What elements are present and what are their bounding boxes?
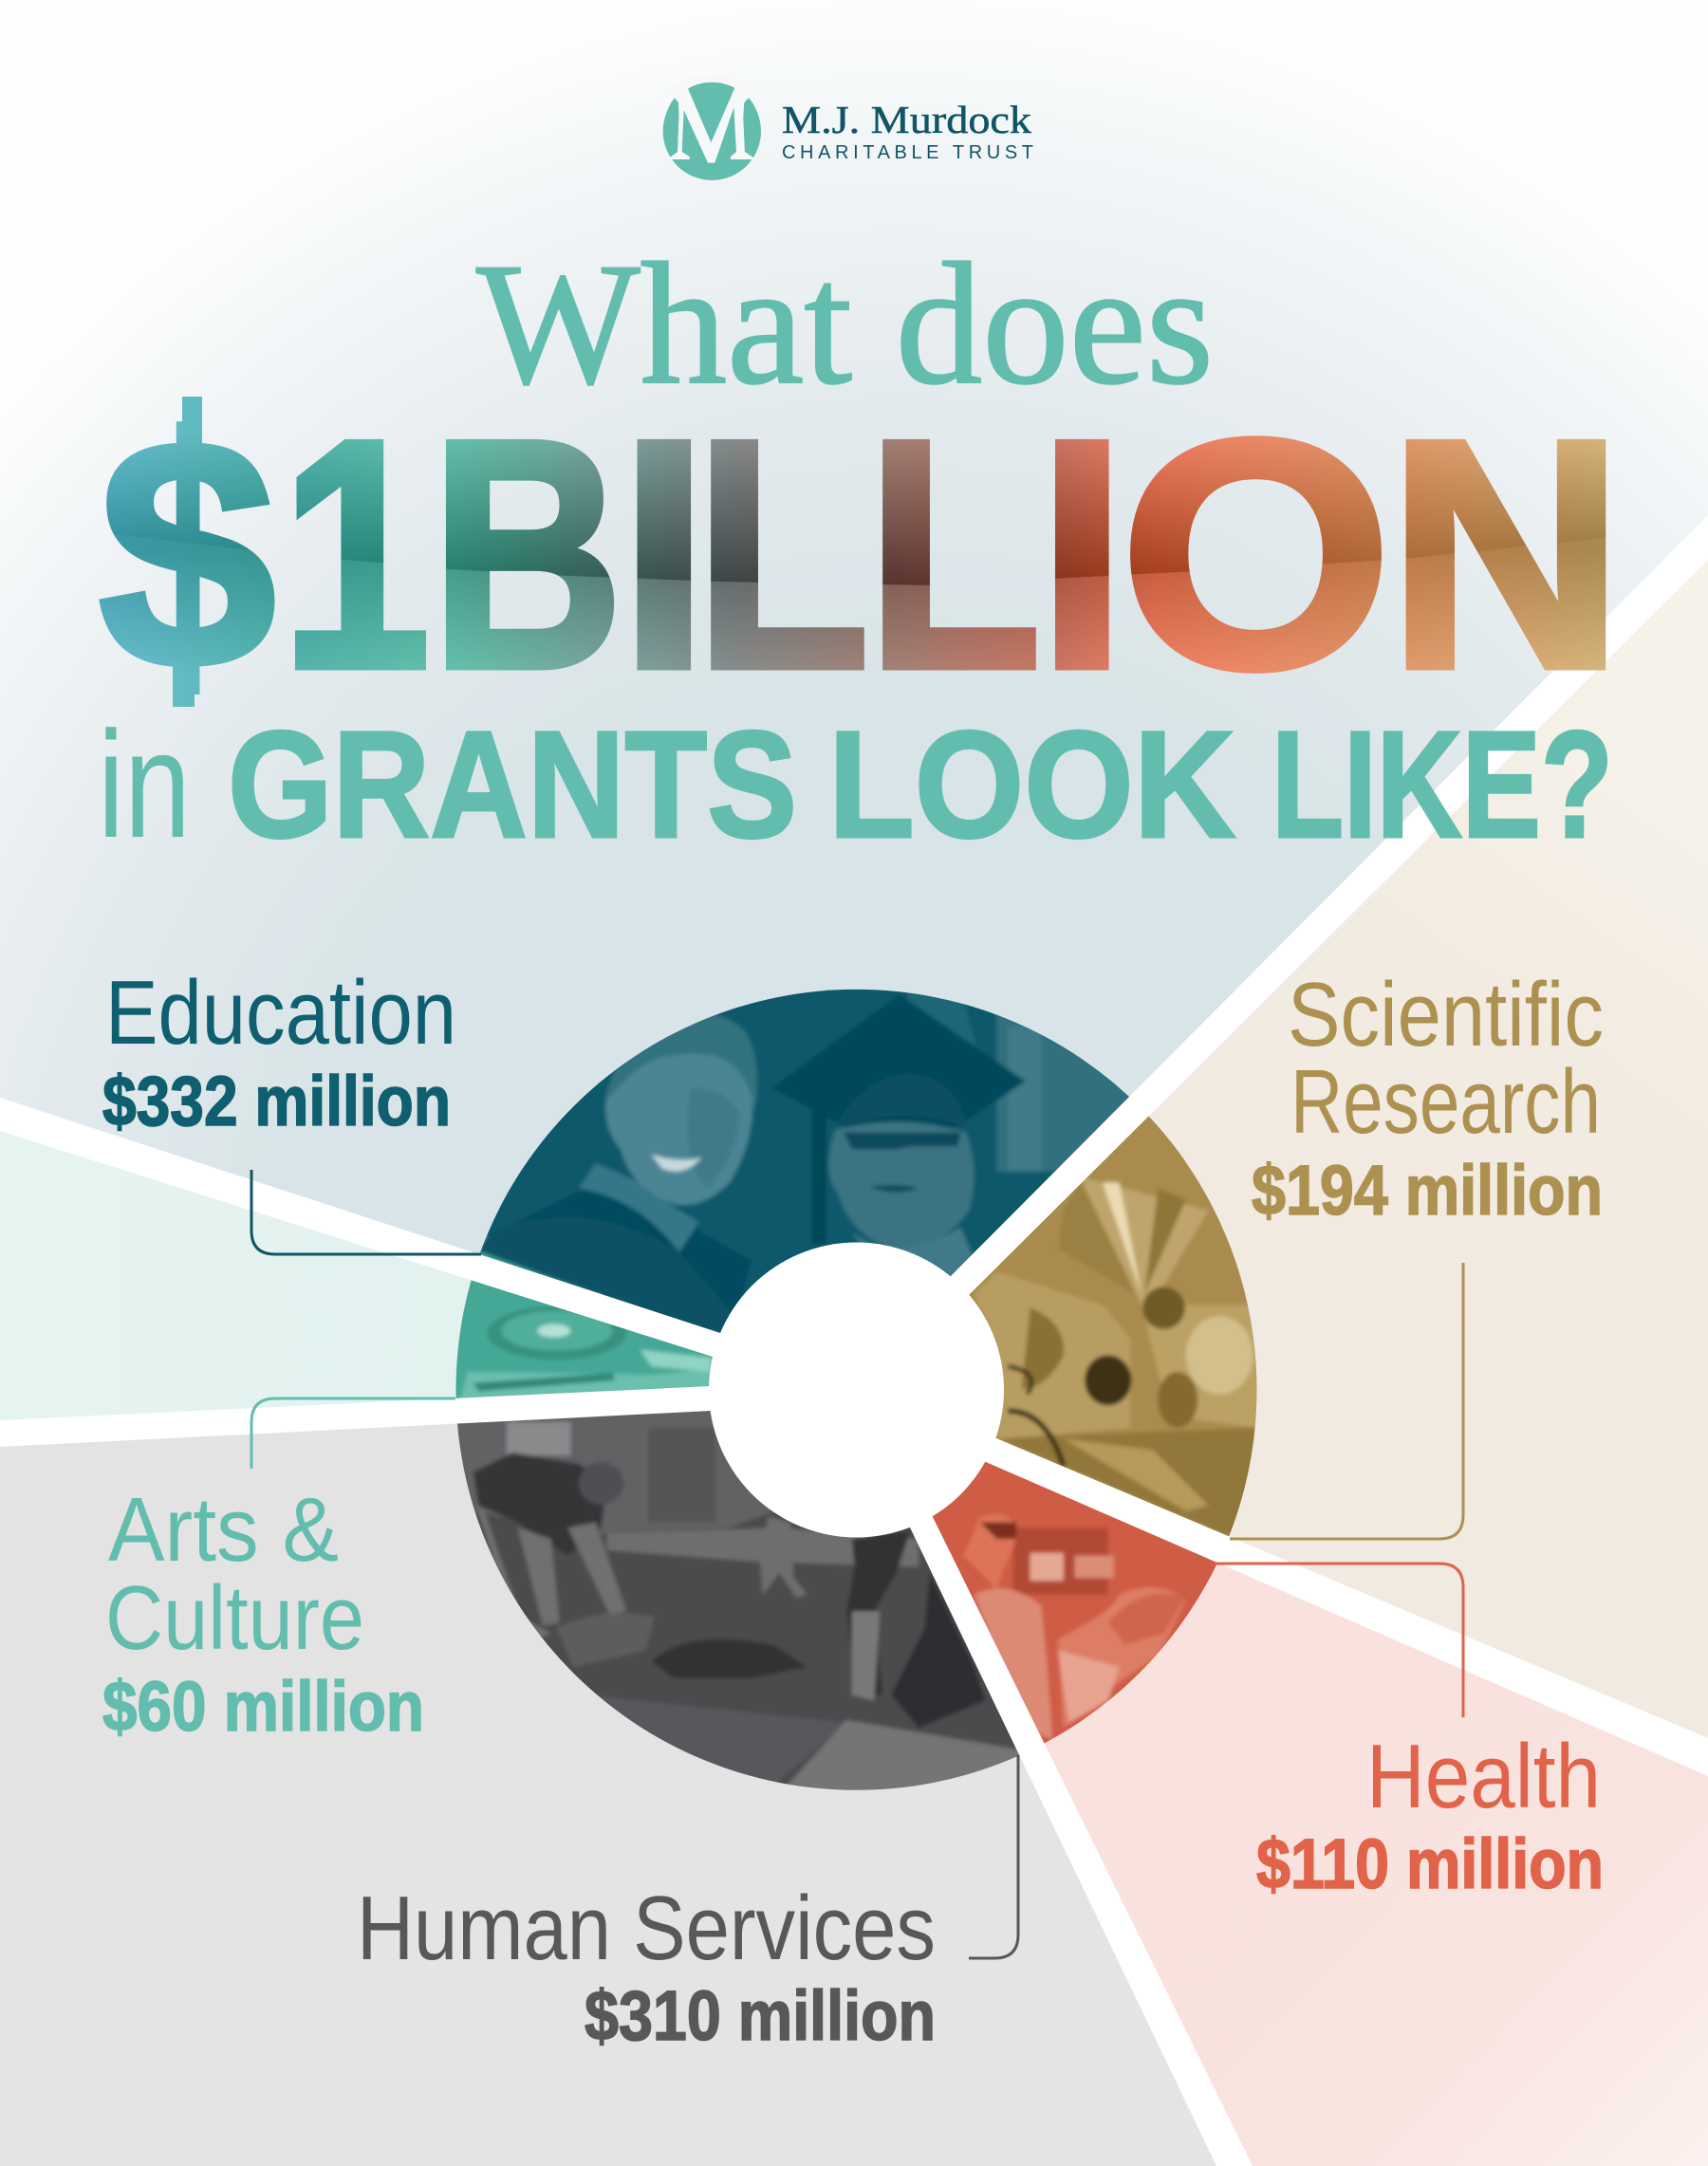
title line 2: $1BILLION: B — [431, 372, 623, 736]
word: in: in — [98, 699, 191, 869]
center hole — [709, 1243, 1004, 1537]
connector: arts — [251, 1398, 455, 1469]
connector: health — [1215, 1564, 1463, 1717]
amount: education: $332 million — [102, 1062, 451, 1140]
connector: science — [1230, 1263, 1463, 1539]
word: LIKE?: LIKE? — [1272, 699, 1613, 869]
amount: arts: $60 million — [102, 1667, 424, 1746]
amount: science: $194 million — [1252, 1151, 1603, 1230]
label: education: Education — [105, 962, 456, 1064]
photo: scientific research — [969, 1116, 1256, 1537]
amount: human services: $310 million — [585, 1976, 936, 2055]
title line 2: $1BILLION: $ — [99, 372, 276, 736]
title line 2: $1BILLION — [99, 372, 1624, 736]
title line 2: $1BILLION: L — [866, 372, 1042, 736]
photo: education — [480, 989, 1186, 1333]
title line 2: $1BILLION: N — [1387, 372, 1624, 736]
photo: health — [932, 1461, 1216, 1744]
label: human services: Human Services — [357, 1878, 936, 1979]
amount: health: $110 million — [1256, 1824, 1604, 1903]
culture line: Culture — [105, 1567, 364, 1669]
label: health — [1256, 1726, 1604, 1903]
title line 2: $1BILLION: 1 — [281, 372, 431, 736]
photo: arts and culture — [455, 1250, 713, 1398]
word: GRANTS: GRANTS — [228, 699, 797, 869]
title line 2: $1BILLION: O — [1120, 372, 1393, 736]
title line 2: $1BILLION: I — [1036, 372, 1127, 736]
title line 2: $1BILLION: L — [695, 372, 870, 736]
title line 3 — [98, 699, 1613, 869]
connector: human services — [969, 1755, 1018, 1958]
pie of photos — [384, 916, 1365, 1851]
research line: Research — [1290, 1051, 1601, 1153]
label: education — [102, 962, 456, 1140]
word: LOOK: LOOK — [828, 699, 1235, 869]
label: human services — [357, 1878, 936, 2055]
label: health: Health — [1366, 1726, 1601, 1827]
connector: education — [251, 1170, 481, 1254]
label: scientific research — [1252, 964, 1604, 1230]
label: arts and culture — [102, 1479, 424, 1746]
logo mark — [661, 76, 763, 180]
logo — [661, 76, 1033, 180]
logo wordmark: M.J. Murdock — [782, 98, 1032, 141]
logo tagline: CHARITABLE TRUST — [782, 142, 1033, 163]
title line 1: What does — [476, 227, 1214, 420]
label: arts and culture: Arts & — [108, 1479, 339, 1581]
title line 2: $1BILLION: I — [619, 372, 710, 736]
photo: human services — [457, 1411, 1019, 1790]
label: scientific research: Scientific — [1288, 964, 1604, 1065]
white dividers — [0, 515, 1708, 2166]
